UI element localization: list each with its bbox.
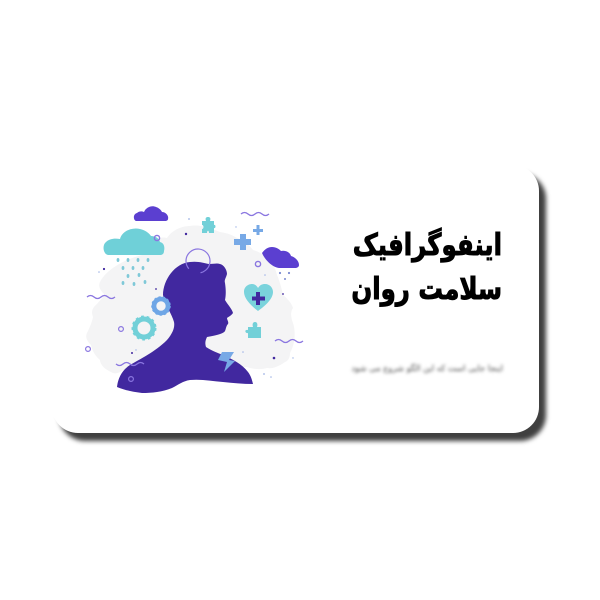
- icon: lightning bolt: [218, 352, 235, 372]
- title: اینفوگرافیک: [353, 228, 502, 263]
- faint dots: [98, 218, 294, 378]
- wavy lines: [87, 212, 303, 366]
- background blob: [86, 226, 295, 373]
- icon: teal gear: [132, 316, 156, 340]
- icon: small ring on cloud: [154, 235, 160, 241]
- panel: card with shadow: [52, 165, 539, 433]
- head silhouette: [117, 262, 253, 393]
- icon: purple cloud right: [262, 247, 299, 280]
- icon: purple cloud top: [134, 206, 168, 221]
- arc over head: [181, 244, 215, 278]
- icon: heart with plus: [244, 284, 273, 311]
- icon: teal puzzle top: [202, 217, 216, 233]
- icon: blue gear: [152, 297, 170, 315]
- icon: teal rain cloud: [104, 228, 164, 286]
- blurred subtitle: اینجا جایی است که این الگو شروع می شود: [351, 363, 503, 373]
- title: [351, 227, 502, 307]
- icon: small ring right: [255, 261, 261, 267]
- title: سلامت روان: [351, 272, 502, 307]
- icon: large plus: [234, 234, 251, 250]
- small dots: [103, 233, 284, 359]
- small rings: [86, 327, 133, 381]
- icon: teal puzzle lower: [245, 322, 261, 338]
- icon: small plus: [253, 225, 263, 235]
